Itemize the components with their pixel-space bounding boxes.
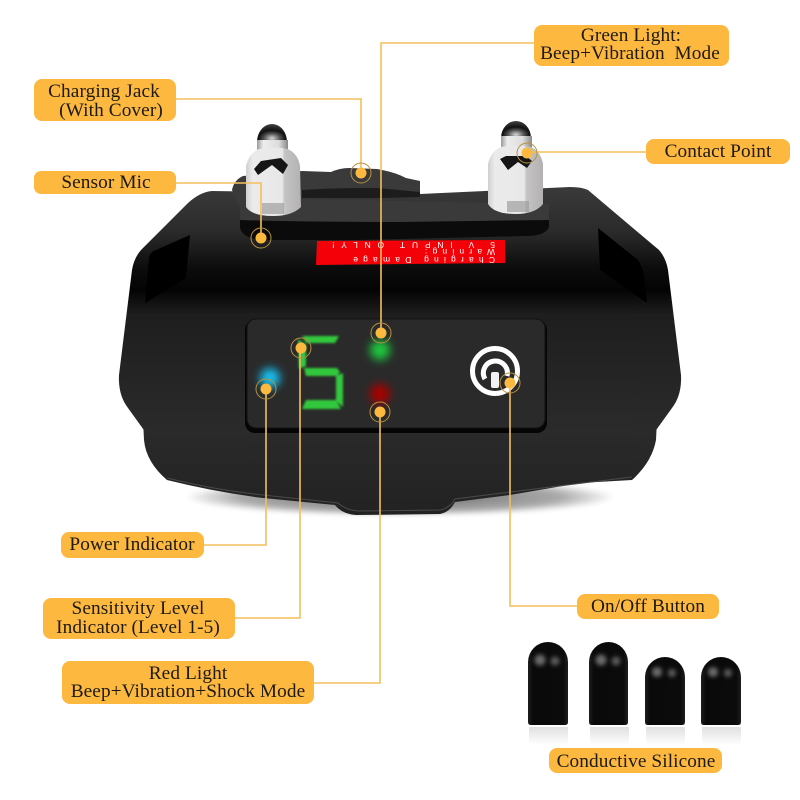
on/off button	[472, 348, 518, 394]
device shadow	[185, 478, 615, 516]
callout: red light: Beep+Vibration+Shock Mode	[71, 681, 305, 702]
callout: contact point	[517, 139, 790, 164]
callout: sensor mic: Sensor Mic	[61, 172, 151, 193]
warning label: Warning:	[420, 247, 495, 257]
callout: power indicator	[61, 379, 276, 558]
left strap slot	[145, 235, 190, 303]
left contact post	[246, 124, 301, 216]
warning label: 5 V INPUT ONLY!	[325, 240, 495, 250]
warning label: Charging Damage	[348, 255, 495, 265]
callout: charging jack	[34, 79, 371, 183]
callout: charging jack: Charging Jack	[48, 81, 160, 102]
cap 2	[589, 642, 629, 745]
control panel	[245, 319, 547, 433]
right strap slot	[598, 228, 647, 303]
base rim line	[167, 477, 632, 511]
device main body	[119, 187, 681, 433]
device: collar receiver	[119, 121, 681, 516]
mounting plate	[240, 199, 549, 240]
callout: contact point: Contact Point	[665, 141, 772, 162]
callout: green light: Beep+Vibration Mode	[540, 43, 720, 64]
callout: conductive silicone: Conductive Silicone	[557, 751, 715, 772]
silicone caps	[528, 642, 741, 745]
red LED	[370, 384, 390, 404]
cap 3	[645, 657, 685, 745]
charging jack cover	[232, 168, 420, 207]
callout: red light	[62, 402, 390, 704]
power LED	[260, 368, 280, 388]
right contact post	[488, 121, 543, 214]
callout: red light: Red Light	[149, 663, 228, 684]
cap 4	[701, 657, 741, 745]
callout: sensitivity level: Indicator (Level 1-5)	[56, 617, 220, 638]
callout: sensitivity level	[43, 338, 311, 639]
cap 1	[528, 642, 568, 745]
callout: charging jack: (With Cover)	[59, 100, 163, 121]
device lower base	[143, 420, 657, 515]
digit display: 5	[298, 336, 343, 409]
callout: green light: Green Light:	[581, 25, 681, 46]
callout: green light	[371, 25, 729, 343]
callout: power indicator: Power Indicator	[69, 534, 195, 555]
callout: on/off button: On/Off Button	[591, 596, 705, 617]
green LED	[370, 340, 390, 360]
callout: sensor mic	[34, 171, 271, 248]
callout: on/off button	[500, 373, 719, 619]
callout: sensitivity level: Sensitivity Level	[72, 598, 204, 619]
warning label	[316, 240, 505, 265]
